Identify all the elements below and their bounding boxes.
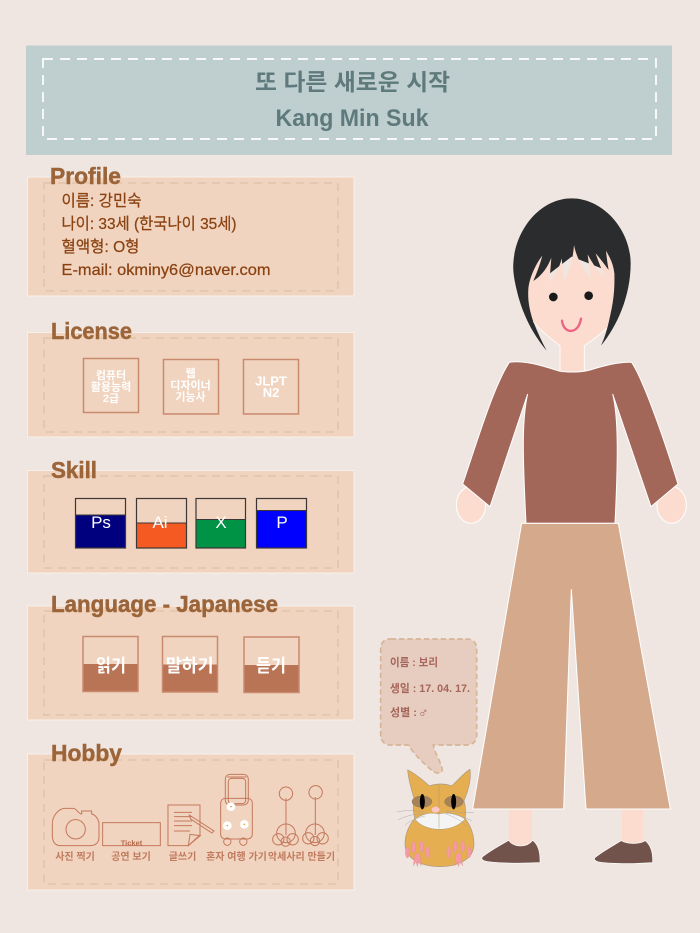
language bar: reading [83,636,138,692]
skill bar: P [256,498,306,548]
hobby: writing: 글쓰기 [169,850,196,863]
hobby: watching shows: Ticket [121,838,143,848]
face and neck [528,245,614,372]
hobby: watching shows: 공연 보기 [111,850,151,863]
cat whiskers [397,811,474,827]
eyes [549,291,593,301]
license: computer skills [84,358,138,412]
trousers [473,523,670,809]
cat body [405,818,474,867]
license: web designer: 디자이너 [170,379,211,392]
heading: skill: Skill [51,457,97,483]
smile [562,319,581,331]
panel: hobby [28,740,354,890]
hobby: watching shows [103,823,160,863]
panel: license [28,318,354,437]
cat nose [432,807,440,813]
hobby: photography: 사진 찍기 [55,850,95,863]
language bar: reading: 읽기 [96,656,126,676]
language bar: speaking [162,636,218,692]
lower body [473,523,670,864]
cat illustration [397,769,474,867]
profile details: 이름: 강민숙 [62,192,142,210]
cat head [408,769,470,819]
skill bar: Ps: Ps [91,513,111,532]
sweater [463,362,678,523]
license: JLPT N2 [244,360,298,414]
profile details: E-mail: okminy6@naver.com [62,262,270,279]
license: computer skills: 컴퓨터 [96,369,126,382]
heading: hobby: Hobby [51,740,122,766]
skill bar: Ai: Ai [152,513,168,532]
heading: profile: Profile [50,163,121,189]
license: web designer [164,360,218,414]
legs [509,807,643,846]
cat paws [405,841,471,867]
heading: license: License [51,318,132,344]
language bar: listening [244,637,299,692]
cat muzzle [415,813,465,829]
speech bubble: pet details: 성별 : [390,706,417,719]
speech bubble: pet details: 생일 : 17. 04. 17. [390,681,470,695]
skill bar: X [196,498,246,548]
license: web designer: 기능사 [175,390,206,404]
language bar: listening: 듣기 [256,656,286,676]
hobby: accessory making: 악세사리 만들기 [268,850,335,863]
jaw and neck outline [533,322,607,372]
title banner [26,46,672,155]
speech bubble: pet details: ♂ [418,704,428,720]
hobby: writing [168,805,214,863]
title banner: Kang Min Suk [276,105,429,132]
profile details [62,192,270,279]
hobby: accessory making [268,786,335,863]
hair [513,198,631,351]
hobby: solo travel [206,774,267,863]
hobby: solo travel: 혼자 여행 가기 [206,850,267,863]
language bar: speaking: 말하기 [166,656,214,676]
speech bubble: pet details: 이름 : 보리 [390,656,438,669]
license: JLPT N2: N2 [263,385,279,400]
character illustration [456,198,686,864]
shoes [482,840,653,864]
skill bar: Ps [76,498,126,548]
skill bar: Ai [136,498,186,548]
hobby: photography [52,808,99,863]
license: computer skills: 활용능력 [91,380,131,394]
skill bar: P: P [276,513,288,532]
cat eyes [412,794,463,809]
title banner: 또 다른 새로운 시작 [255,69,450,95]
profile details: 나이: 33세 (한국나이 35세) [62,215,236,233]
cat head outline [408,769,470,819]
panel: language [28,591,354,720]
speech bubble: pet details [381,639,477,773]
upper body [456,198,686,523]
profile details: 혈액형: O형 [62,238,140,256]
license: web designer: 웹 [185,366,196,380]
skill bar: X: X [215,513,227,532]
license: computer skills: 2급 [103,392,119,405]
panel: skill [28,457,354,573]
license: JLPT N2: JLPT [255,374,287,388]
heading: language: Language - Japanese [51,591,278,617]
panel: profile [28,163,354,296]
hands [456,487,686,523]
